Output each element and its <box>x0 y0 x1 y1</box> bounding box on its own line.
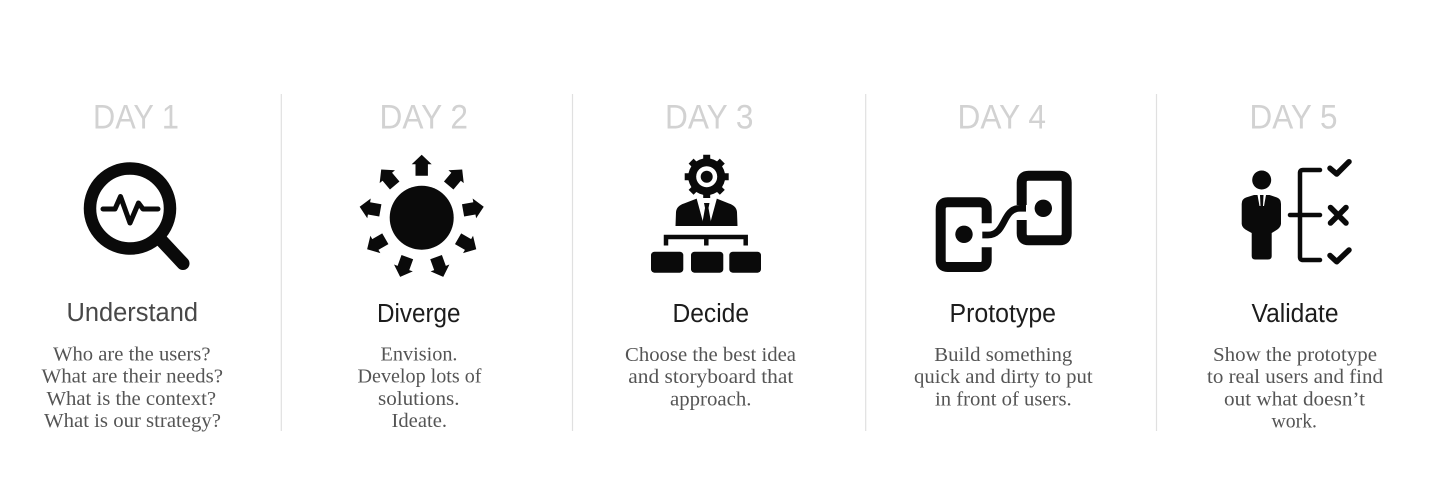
panel: day 5 validate <box>1207 98 1383 432</box>
text: day 2 description: Develop lots of <box>358 366 482 388</box>
heading: day 4: DAY 4 <box>958 98 1046 136</box>
text: day 1 description: What are their needs? <box>42 366 223 388</box>
text: day 5 description <box>1207 344 1383 432</box>
panel: day 4 prototype <box>914 98 1093 410</box>
text: day 2 description: Ideate. <box>392 410 447 432</box>
icon: circle with radiating arrows <box>358 155 485 280</box>
text: day 1 description: Who are the users? <box>53 344 211 366</box>
text: day 1 description: What is our strategy? <box>44 410 221 432</box>
panel: day 1 understand <box>42 98 223 432</box>
text: day 2 description <box>358 344 482 432</box>
text: day 2 description: solutions. <box>378 388 460 410</box>
text: day 5 description: Show the prototype <box>1213 344 1377 366</box>
icon: person with gear head and org chart <box>651 155 761 273</box>
title: decide: Decide <box>672 300 749 328</box>
text: day 5 description: work. <box>1272 410 1317 432</box>
heading: day 5: DAY 5 <box>1250 98 1338 136</box>
icon: two linked devices <box>941 176 1067 267</box>
text: day 4 description: in front of users. <box>935 388 1072 410</box>
title: diverge: Diverge <box>377 300 460 328</box>
text: day 2 description: Envision. <box>380 344 458 366</box>
text: day 3 description <box>625 344 796 410</box>
title: understand: Understand <box>66 299 198 327</box>
text: day 4 description: Build something <box>934 344 1072 366</box>
text: day 5 description: to real users and find <box>1207 366 1383 388</box>
text: day 4 description: quick and dirty to put <box>914 366 1093 388</box>
heading: day 2: DAY 2 <box>380 98 468 136</box>
title: validate: Validate <box>1252 300 1338 328</box>
panel: day 3 decide <box>625 98 796 410</box>
heading: day 1: DAY 1 <box>93 98 179 136</box>
text: day 4 description <box>914 344 1093 410</box>
panel: day 2 diverge <box>358 98 485 432</box>
text: day 5 description: out what doesn’t <box>1224 388 1365 410</box>
text: day 3 description: Choose the best idea <box>625 344 796 366</box>
text: day 3 description: approach. <box>670 388 752 410</box>
icon: magnifier with pulse line <box>90 168 183 264</box>
text: day 1 description <box>42 344 223 432</box>
text: day 1 description: What is the context? <box>46 388 216 410</box>
icon: person beside checklist <box>1242 162 1349 262</box>
text: day 3 description: and storyboard that <box>628 366 794 388</box>
heading: day 3: DAY 3 <box>665 98 754 136</box>
title: prototype: Prototype <box>950 300 1056 328</box>
